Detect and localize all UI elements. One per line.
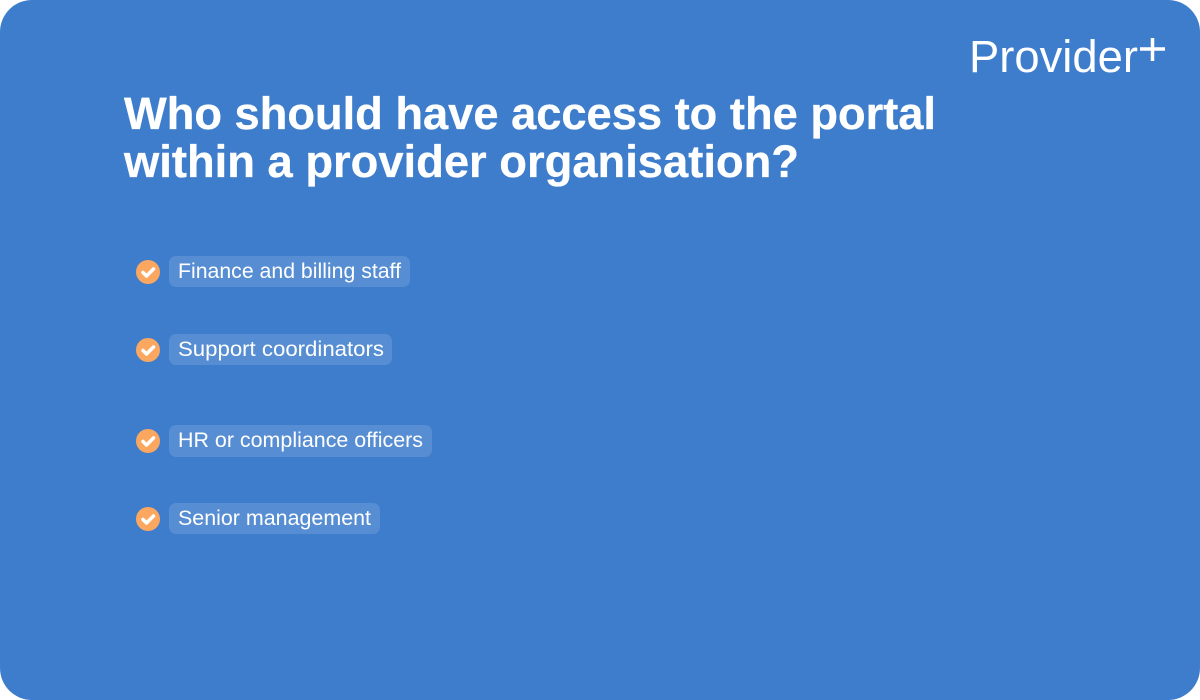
label pill [169, 256, 410, 287]
icon: check badge [136, 338, 160, 362]
label text: Senior management [178, 507, 371, 530]
icon: check badge [136, 507, 160, 531]
title: within a provider organisation? [123, 136, 799, 187]
label text: Finance and billing staff [178, 260, 401, 283]
list item: Finance and billing staff [136, 256, 410, 287]
title: Who should have access to the portal [124, 88, 936, 139]
list item: Support coordinators [136, 334, 392, 365]
label pill [169, 334, 392, 365]
label text: Support coordinators [178, 338, 384, 361]
label pill [169, 425, 432, 457]
label pill [169, 503, 380, 534]
checklist [136, 256, 432, 534]
logo: Provider+: Provider [969, 31, 1138, 82]
list item: Senior management [136, 503, 380, 534]
icon: check badge [136, 429, 160, 453]
list item: HR or compliance officers [136, 425, 432, 457]
label text: HR or compliance officers [178, 429, 423, 452]
icon: check badge [136, 260, 160, 284]
title [123, 88, 936, 187]
